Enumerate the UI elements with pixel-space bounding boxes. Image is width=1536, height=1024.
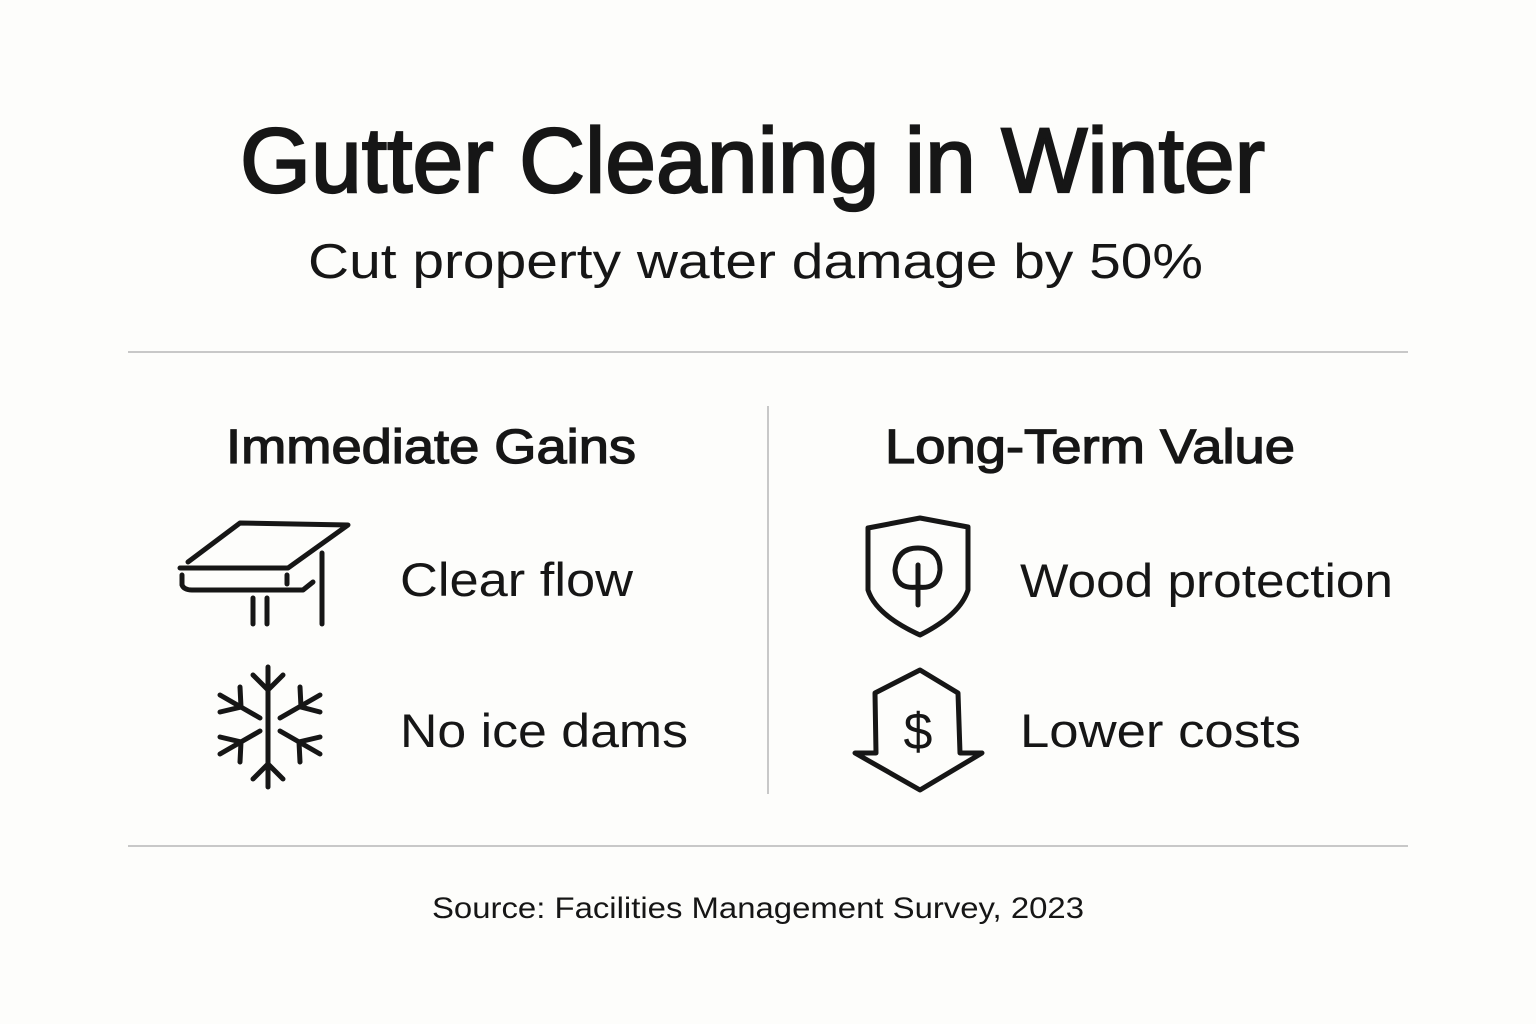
source: Source: Facilities Management Survey, 2023 xyxy=(432,892,1084,925)
text: wood protection: Wood protection xyxy=(1020,554,1393,607)
text: no ice dams: No ice dams xyxy=(400,704,688,757)
panel: long-term value xyxy=(855,421,1393,790)
heading: long-term value: Long-Term Value xyxy=(885,421,1295,474)
icon: dollar down arrow: $ xyxy=(904,703,933,761)
icon: gutter xyxy=(180,523,348,624)
icon: shield with tree xyxy=(868,518,968,635)
subtitle: Cut property water damage by 50% xyxy=(308,235,1203,289)
panel: immediate gains xyxy=(180,421,688,787)
text: clear flow: Clear flow xyxy=(400,553,634,606)
heading: immediate gains: Immediate Gains xyxy=(226,421,636,474)
icon: snowflake xyxy=(220,667,320,787)
title: Gutter Cleaning in Winter xyxy=(240,110,1265,212)
text: lower costs: Lower costs xyxy=(1020,704,1301,757)
icon: dollar down arrow xyxy=(855,670,982,790)
